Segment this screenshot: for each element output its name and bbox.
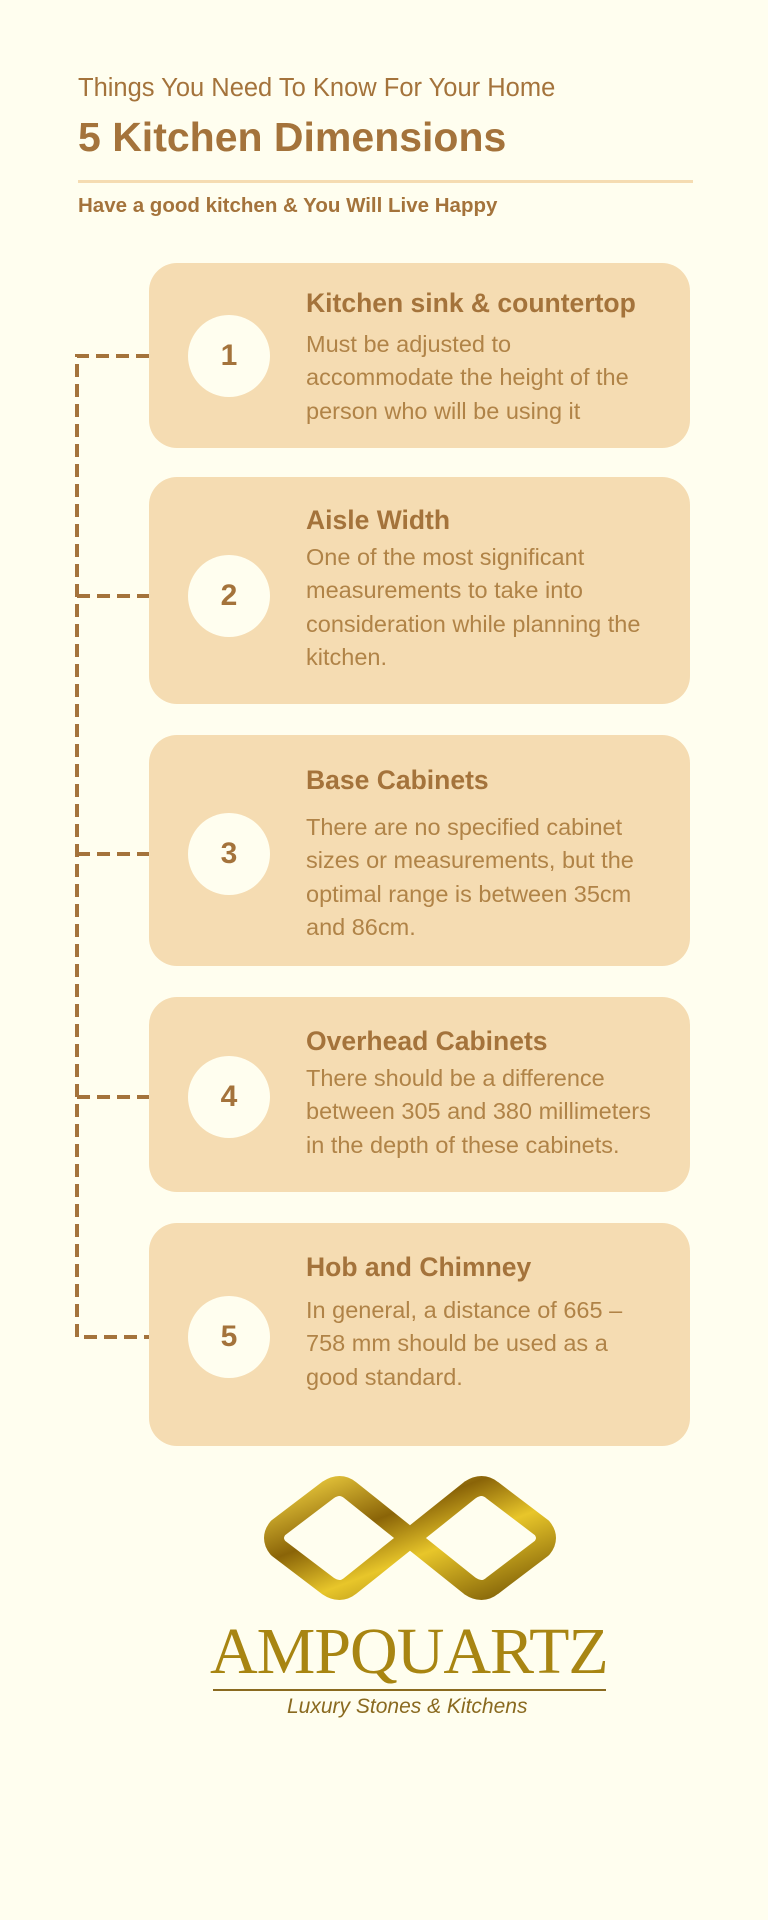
body 2: One of the most significant: [306, 544, 584, 570]
connector: dashed timeline: [75, 354, 149, 1339]
body 3: and 86cm.: [306, 914, 416, 940]
number 2: 2: [221, 579, 237, 612]
body 4: in the depth of these cabinets.: [306, 1132, 620, 1158]
body 3: There are no specified cabinet: [306, 814, 622, 840]
header: [78, 74, 555, 217]
body 5: good standard.: [306, 1364, 463, 1390]
brand name: AMPQUARTZ: [210, 1615, 608, 1688]
kicker text: Things You Need To Know For Your Home: [78, 74, 555, 102]
number 5: 5: [221, 1320, 237, 1353]
number 4: [188, 1056, 270, 1138]
heading 2: Aisle Width: [306, 505, 450, 535]
subtitle: Have a good kitchen & You Will Live Happy: [78, 194, 497, 217]
body 5: In general, a distance of 665 –: [306, 1297, 622, 1323]
panel: 3: [149, 735, 690, 966]
logo: [210, 1476, 608, 1718]
body 4: [306, 1065, 651, 1158]
heading 3: Base Cabinets: [306, 765, 489, 795]
body 3: [306, 814, 634, 940]
body 4: between 305 and 380 millimeters: [306, 1098, 651, 1124]
body 5: 758 mm should be used as a: [306, 1330, 608, 1356]
body 2: consideration while planning the: [306, 611, 640, 637]
number 1: [188, 315, 270, 397]
number 3: [188, 813, 270, 895]
icon: gold infinity: [264, 1476, 556, 1600]
body 2: measurements to take into: [306, 577, 583, 603]
panel: 4: [149, 997, 690, 1192]
panel: 5: [149, 1223, 690, 1446]
number 4: 4: [221, 1080, 237, 1113]
heading 1: Kitchen sink & countertop: [306, 288, 636, 318]
tagline: Luxury Stones & Kitchens: [287, 1695, 527, 1718]
heading 4: Overhead Cabinets: [306, 1026, 548, 1056]
number 2: [188, 555, 270, 637]
body 4: There should be a difference: [306, 1065, 605, 1091]
body 5: [306, 1297, 622, 1390]
body 1: person who will be using it: [306, 398, 580, 424]
body 2: kitchen.: [306, 644, 387, 670]
number 1: 1: [221, 339, 237, 372]
body 3: sizes or measurements, but the: [306, 847, 634, 873]
body 1: accommodate the height of the: [306, 364, 629, 390]
body 1: Must be adjusted to: [306, 331, 511, 357]
number 3: 3: [221, 837, 237, 870]
body 1: [306, 331, 629, 424]
body 3: optimal range is between 35cm: [306, 881, 631, 907]
panel: 2: [149, 477, 690, 704]
body 2: [306, 544, 640, 670]
number 5: [188, 1296, 270, 1378]
heading 5: Hob and Chimney: [306, 1252, 531, 1282]
panel: 1: [149, 263, 690, 448]
title: 5 Kitchen Dimensions: [78, 114, 506, 160]
